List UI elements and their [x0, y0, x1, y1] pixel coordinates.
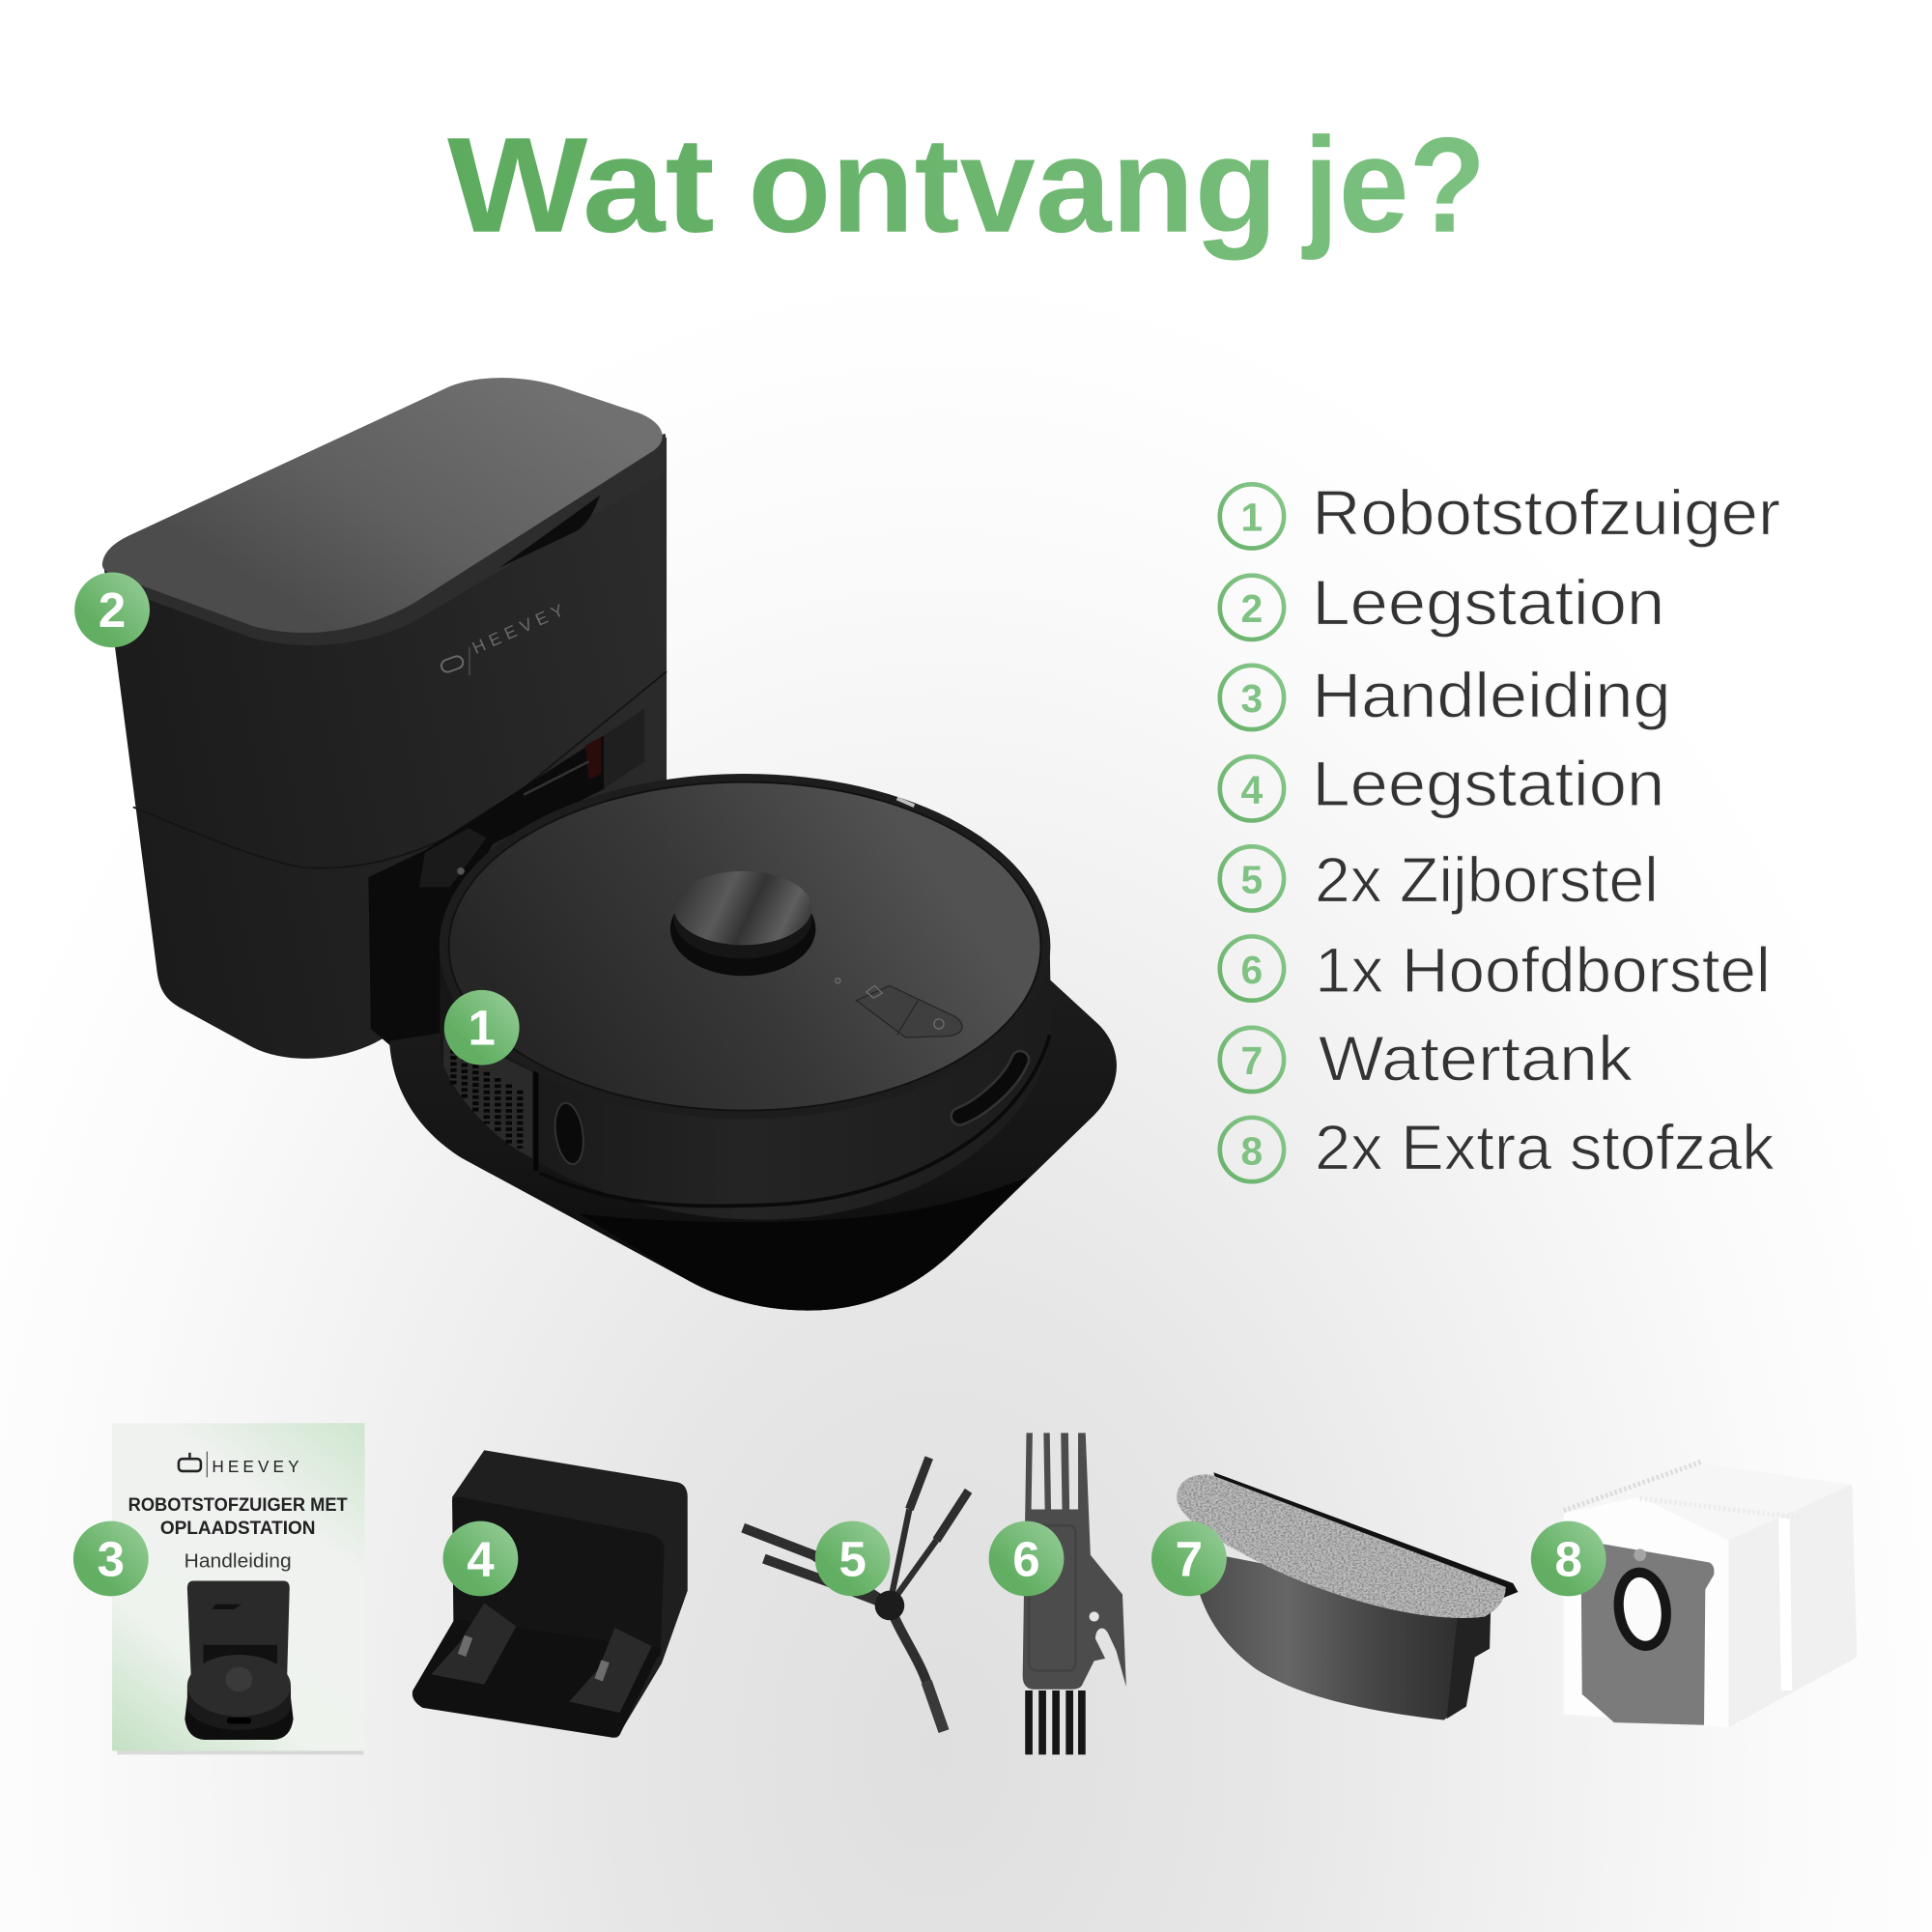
number badge 6	[989, 1521, 1064, 1596]
number badge 8: 8	[1555, 1531, 1582, 1586]
number badge 5: 5	[838, 1531, 867, 1586]
station body	[103, 438, 667, 1059]
title	[447, 109, 1486, 261]
manual logo	[179, 1452, 303, 1477]
accessory: water tank with mop	[1177, 1472, 1518, 1720]
item 8: 2x Extra stofzak	[1315, 1112, 1776, 1183]
number badge 1	[444, 990, 520, 1065]
accessory: side brush	[743, 1458, 969, 1731]
accessory: dust bag	[1564, 1462, 1857, 1727]
item 4: 4	[1241, 768, 1264, 812]
item 6: 6	[1241, 948, 1263, 992]
item 7: Watertank	[1319, 1024, 1634, 1095]
item 2: Leegstation	[1312, 568, 1664, 639]
item 8: 8	[1241, 1128, 1263, 1173]
main product: robot vacuum on emptying station	[102, 378, 1117, 1311]
number badge 1: 1	[469, 1001, 496, 1056]
station docking opening	[368, 708, 644, 1047]
number badge 6: 6	[1012, 1531, 1040, 1586]
item 2: 2	[1241, 586, 1263, 631]
accessory: manual booklet	[112, 1423, 365, 1754]
station seam	[133, 671, 667, 868]
bristles	[1029, 1690, 1082, 1754]
item 3: Handleiding	[1312, 660, 1671, 731]
front sensor slot	[552, 1101, 587, 1166]
title: Wat	[447, 109, 715, 261]
robot rim	[440, 774, 1050, 1119]
item 1: Robotstofzuiger	[1312, 478, 1780, 550]
number badge 4	[443, 1521, 518, 1596]
item 4: Leegstation	[1312, 749, 1664, 820]
accessory: manual booklet: OPLAADSTATION	[160, 1518, 316, 1539]
mop pad	[1177, 1474, 1506, 1618]
item 5: 5	[1241, 858, 1263, 902]
bag card	[1580, 1540, 1714, 1725]
robot left vents	[443, 1029, 536, 1171]
item 5: 2x Zijborstel	[1315, 845, 1659, 917]
robot side wall	[440, 947, 1051, 1220]
item 6: 1x Hoofdborstel	[1315, 935, 1771, 1007]
number badge 7	[1151, 1521, 1227, 1596]
item 7	[1220, 1024, 1634, 1095]
robot top surface	[450, 783, 1040, 1110]
dock right contact	[569, 1628, 652, 1713]
legend list	[1220, 478, 1780, 1183]
title: je?	[1301, 109, 1486, 261]
manual product picture	[185, 1580, 294, 1740]
manual heading: ROBOTSTOFZUIGER MET	[128, 1494, 348, 1516]
base plate	[389, 980, 1117, 1311]
robot control buttons	[836, 979, 962, 1037]
station logo: HEEVEY	[469, 598, 572, 658]
item 7: 7	[1241, 1038, 1263, 1083]
station lid	[102, 378, 667, 645]
accessory: charging dock	[412, 1450, 688, 1738]
right slot	[960, 1060, 1020, 1117]
item 1: 1	[1241, 496, 1263, 540]
number badge 4: 4	[467, 1531, 495, 1586]
station logo	[440, 598, 572, 675]
dock left contact	[431, 1603, 516, 1685]
number badge 2: 2	[99, 582, 126, 638]
number badge 5	[815, 1521, 891, 1596]
number badge 7: 7	[1176, 1531, 1203, 1586]
accessory: main brush tool	[1023, 1433, 1126, 1754]
title: ontvang	[748, 109, 1278, 261]
number badge 3	[73, 1521, 149, 1596]
lidar turret	[670, 871, 815, 976]
number badge 2	[74, 572, 150, 647]
number badge 3: 3	[98, 1531, 125, 1586]
manual subtitle: Handleiding	[185, 1550, 292, 1572]
number badge 8	[1531, 1521, 1606, 1596]
item 3: 3	[1241, 676, 1263, 721]
manual logo: HEEVEY	[212, 1457, 303, 1476]
robot vacuum	[440, 774, 1051, 1220]
bag opening	[1608, 1564, 1676, 1655]
robot bumper lines	[540, 1035, 1050, 1206]
